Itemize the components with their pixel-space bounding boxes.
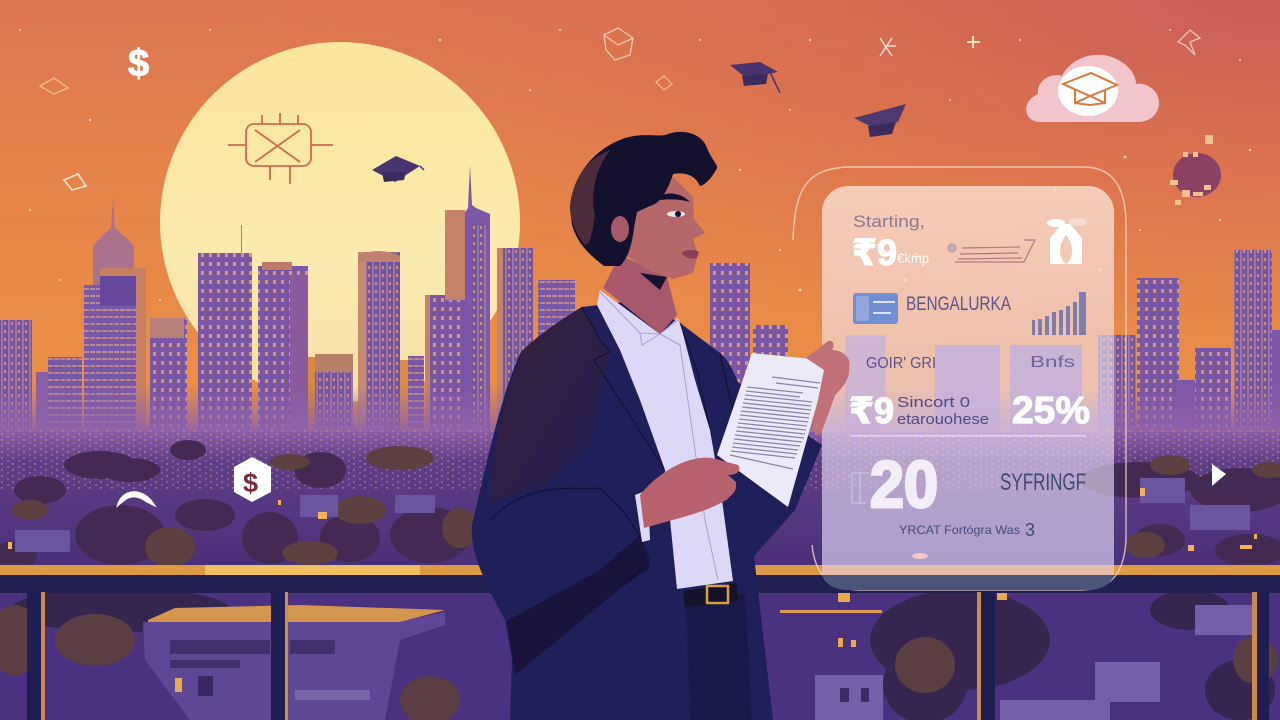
icon: white arc: [118, 492, 154, 505]
icon: dollar sign: $: [128, 43, 149, 85]
hair: [570, 132, 717, 266]
heading: Starting: Starting,: [853, 212, 925, 231]
label: SYFRINGF: SYFRINGF: [1000, 469, 1086, 496]
icon: small scribble: [880, 38, 896, 56]
label: Bnfs: Bnfs: [1030, 354, 1075, 371]
footnote: [899, 520, 1035, 540]
icon: circuit diagram: [228, 113, 333, 184]
sleeve dark drape: [507, 535, 650, 675]
lower hand: [640, 458, 740, 528]
icon: faint sparkle cluster centre: [656, 76, 672, 90]
chart: rising bars: [1032, 292, 1086, 335]
panel body: [822, 186, 1114, 590]
decorative floating icons: [40, 28, 1226, 505]
panel: railing seen through glass: [822, 565, 1114, 590]
icon: hexagon dollar: $: [243, 468, 258, 498]
eyebrow and eye: [660, 194, 690, 217]
jacket outlines: [490, 307, 735, 585]
icon: blue id card: [853, 293, 898, 324]
shirt: [597, 290, 733, 589]
belt: [683, 583, 738, 607]
balcony railing: [0, 565, 1280, 720]
label: BENGALURKA: BENGALURKA: [906, 294, 1011, 315]
background: sunset sky: [0, 0, 1280, 460]
icon: faint bracket: [852, 473, 870, 503]
icon: faint sparkle cluster left: [40, 78, 68, 94]
trousers: [686, 594, 752, 720]
upper hand: [806, 341, 850, 436]
stat: starting figure: ₹9: [852, 232, 897, 273]
icon: small pink mark: [912, 553, 928, 559]
panel: translucent glass stats card: [793, 167, 1126, 590]
icon: graduation cap top: [730, 62, 780, 93]
icon: envelope sketch: [604, 28, 633, 60]
icon: hexagon dollar: [234, 457, 271, 502]
icon: graduation cap near sun: [372, 156, 424, 182]
skyline: distant towers: [0, 165, 1280, 435]
stat: starting figure: [852, 232, 929, 273]
document: [717, 353, 827, 507]
label: GOIR GRI: GOIR' GRI: [866, 355, 936, 372]
figure: young man holding a document: [472, 132, 850, 720]
icon: outline glyph top right: [1178, 30, 1200, 55]
ear: [611, 216, 629, 242]
sun disc: [160, 42, 520, 402]
icon: left scribble: [64, 174, 86, 190]
shirt details: [600, 292, 718, 580]
shirt cuff: [635, 490, 650, 542]
panel outer outline: [793, 167, 1126, 590]
neck: [603, 255, 677, 334]
neck shadow: [640, 273, 667, 290]
mouth: [682, 250, 699, 258]
icon: plus sparkle: [967, 36, 980, 48]
city: ground and tree canopy beyond the railing: [0, 430, 1280, 569]
icon: white gift bag: [1047, 218, 1087, 264]
background stars: [19, 29, 1251, 301]
icon: cloud with graduation cap: [1026, 55, 1159, 122]
jacket shoulder shade: [490, 307, 610, 503]
stat: 25%: 25%: [1012, 390, 1090, 432]
stat: ₹9 figure: ₹9: [849, 390, 894, 431]
icon: scattered cluster: [1170, 135, 1221, 205]
caption: two-line description: [897, 394, 989, 428]
icon: play arrow: [1212, 464, 1226, 486]
footnote: YRCAT Fortógra Was: [899, 523, 1020, 537]
icon: graduation cap right: [854, 104, 906, 137]
building with lit rooftop: [143, 605, 445, 720]
stat: starting figure: €kṁp: [897, 250, 929, 266]
caption: two-line description: etarouohese: [897, 411, 989, 428]
footnote: 3: [1025, 520, 1035, 540]
city: rooftops and trees below the railing: [0, 588, 1280, 720]
stat: 20: 20: [870, 447, 938, 521]
face: [612, 177, 705, 279]
hair highlight: [570, 150, 610, 245]
icon: document sketch: [947, 240, 1035, 262]
jacket: [472, 300, 822, 720]
caption: two-line description: Sincort 0: [897, 394, 970, 411]
